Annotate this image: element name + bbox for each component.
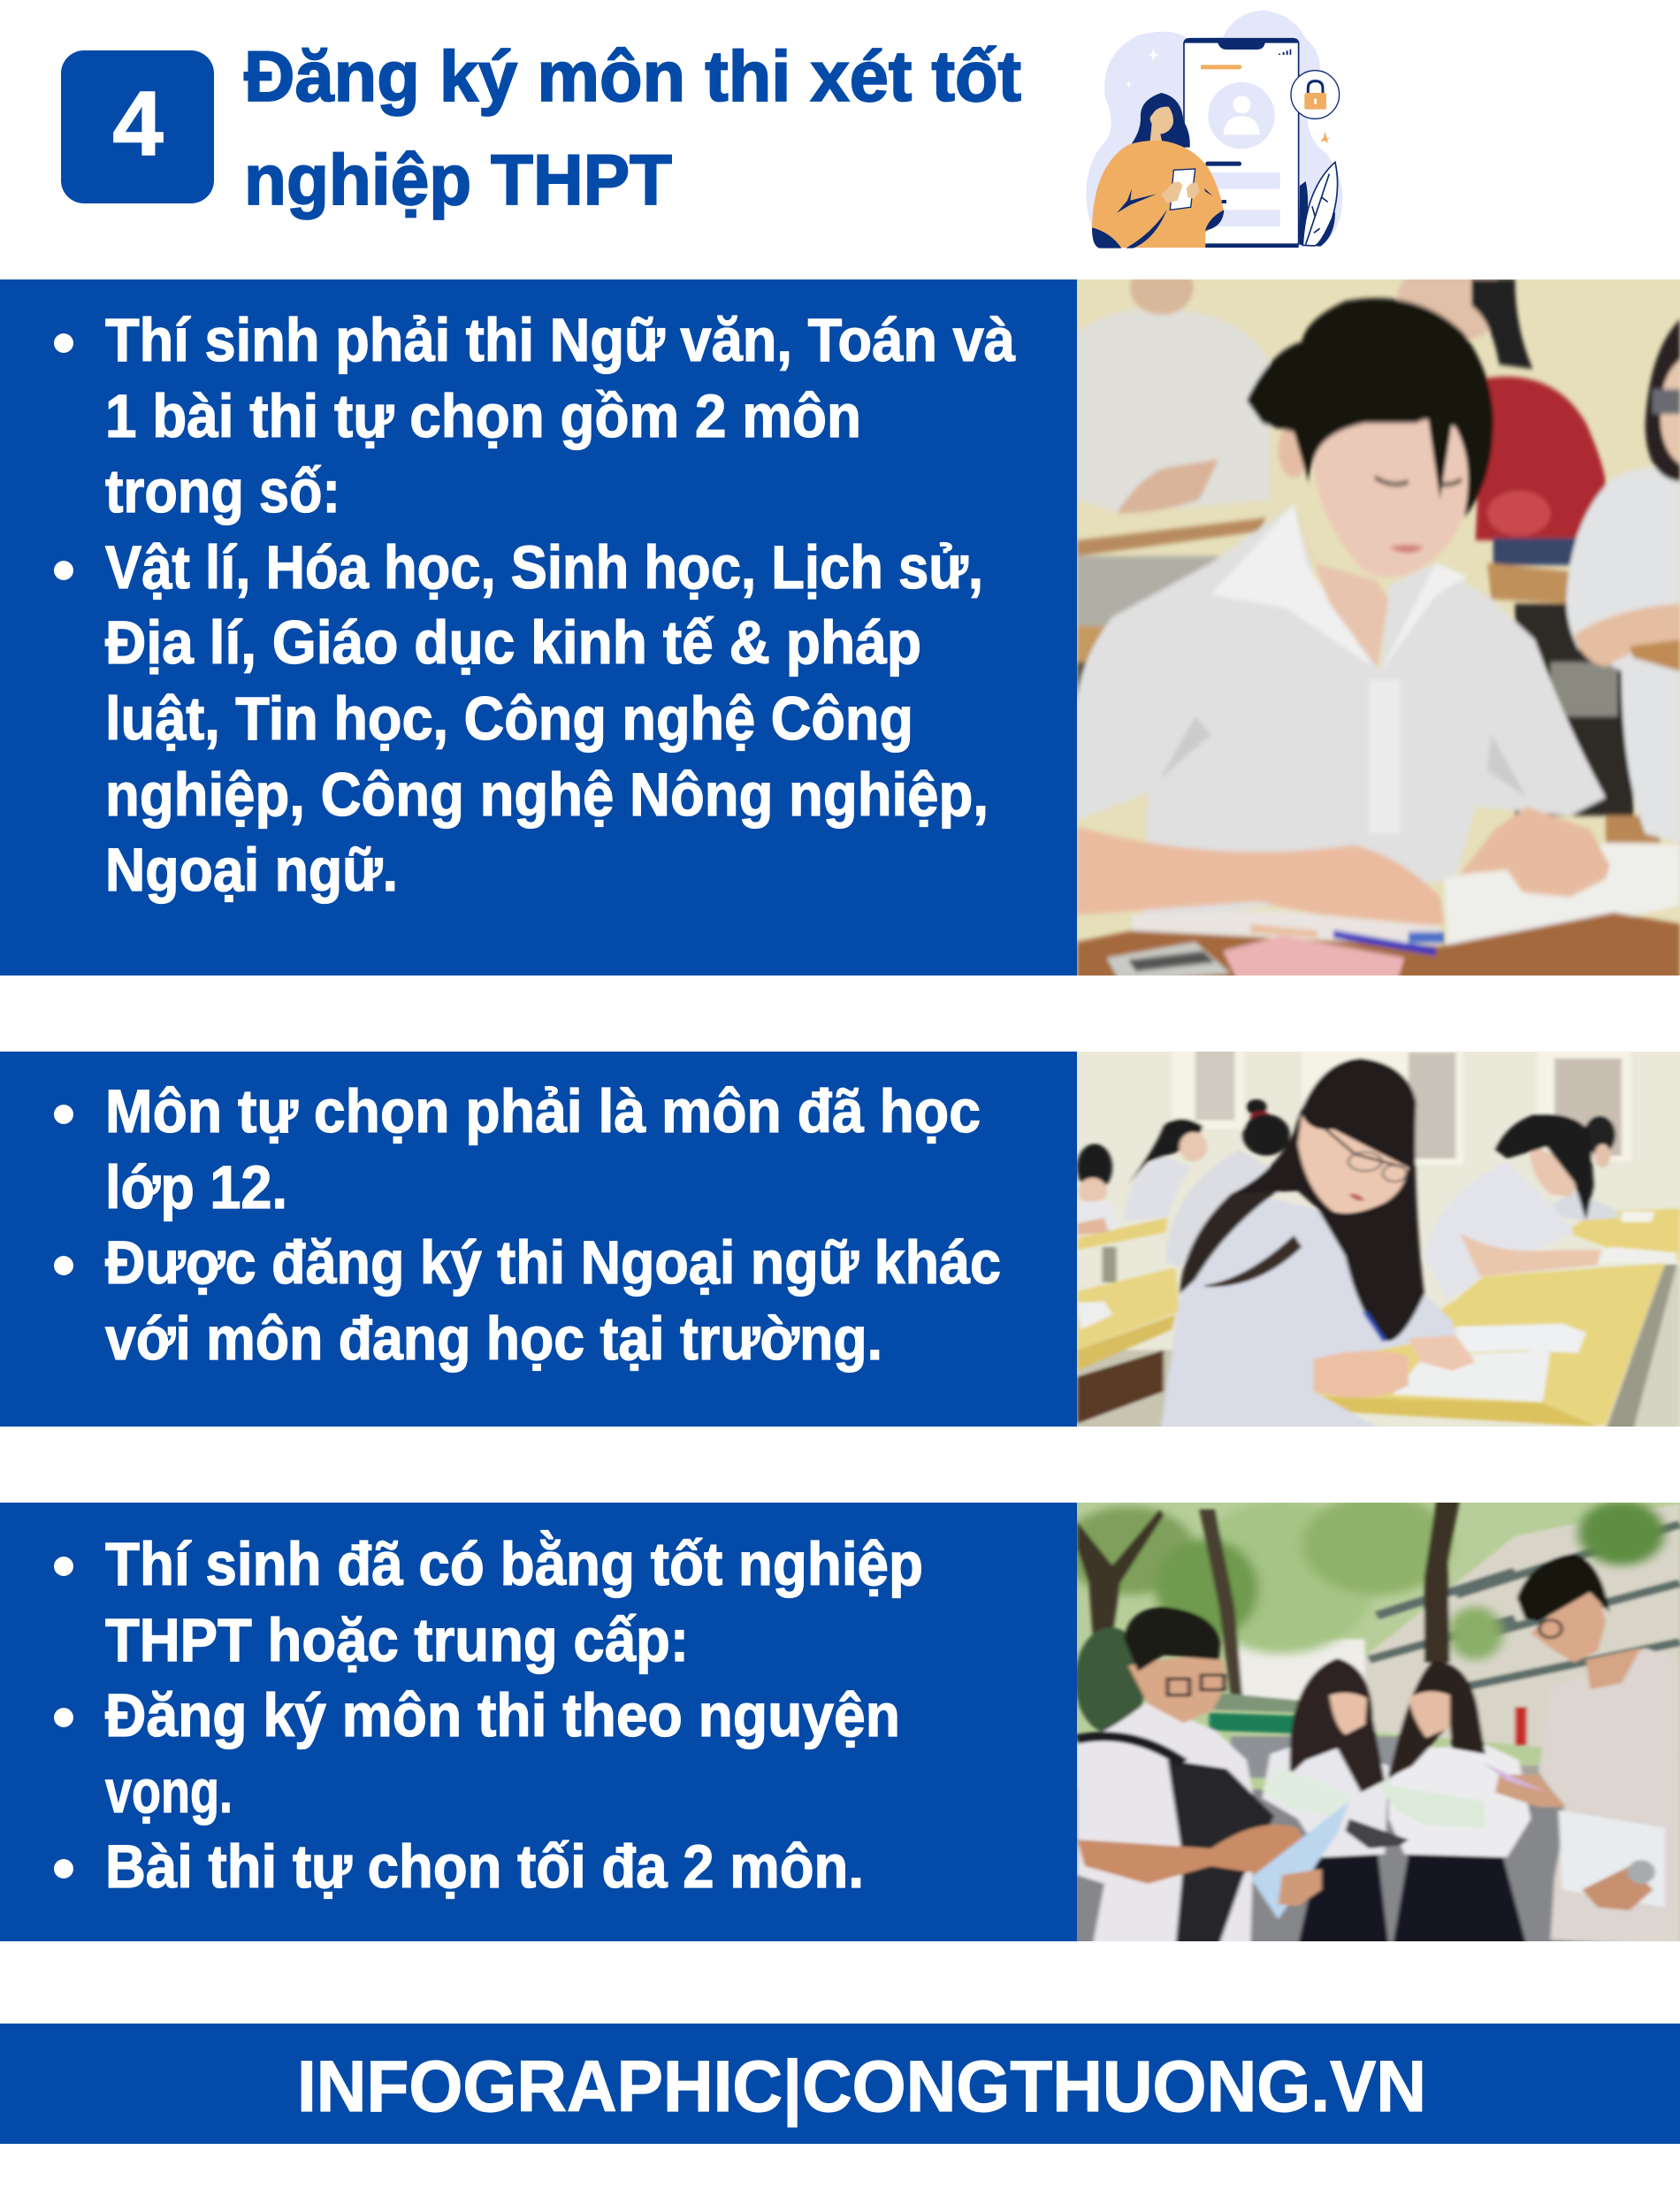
panel 3 background [0,1503,1077,1941]
panel 1: exam subjects [0,261,1680,983]
title [244,37,1021,220]
panel 2 background [0,1052,1077,1427]
panel 1 background [0,279,1077,976]
panel 2 text: lớp 12. [105,1153,287,1221]
panel 2: elective subject rules [0,1050,1680,1435]
panel 2 text: Môn tự chọn phải là môn đã học [105,1077,981,1145]
panel 3 text: Thí sinh đã có bằng tốt nghiệp [105,1530,923,1598]
panel 3 text: Đăng ký môn thi theo nguyện [105,1681,900,1749]
panel 3: candidates with a diploma [0,1495,1680,1948]
panel 1 text: trong số: [105,457,340,525]
panel 3 text [54,1530,923,1901]
footer text: INFOGRAPHIC|CONGTHUONG.VN [297,2047,1426,2128]
photo: students outdoors checking papers [1061,1495,1680,1948]
number badge [61,50,214,203]
header [61,11,1342,249]
panel 2 text: Được đăng ký thi Ngoại ngữ khác [105,1228,1001,1297]
panel 1 text: Thí sinh phải thi Ngữ văn, Toán và [105,306,1016,374]
photo: students in exam room [1077,1050,1680,1435]
title: nghiệp THPT [244,141,672,220]
panel 2 text: với môn đang học tại trường. [105,1305,882,1373]
panel 1 text [54,306,1016,904]
number badge: 4 [112,73,164,174]
panel 1 text: Vật lí, Hóa học, Sinh học, Lịch sử, [105,533,983,601]
panel 1 text: luật, Tin học, Công nghệ Công [105,685,913,753]
panel 3 text: THPT hoặc trung cấp: [105,1606,689,1674]
panel 3 text: vọng. [105,1757,233,1825]
panel 1 text: Địa lí, Giáo dục kinh tế & pháp [105,608,921,677]
panel 1 text: nghiệp, Công nghệ Nông nghiệp, [105,761,989,829]
panel 3 text: Bài thi tự chọn tối đa 2 môn. [105,1833,864,1901]
footer banner [0,2024,1680,2144]
panel 1 text: 1 bài thi tự chọn gồm 2 môn [105,382,861,450]
icon: woman with phone and lock [1086,11,1342,249]
panel 1 text: Ngoại ngữ. [105,836,398,904]
title: Đăng ký môn thi xét tốt [244,37,1021,117]
photo: student writing at desk [1077,261,1680,983]
panel 2 text [54,1077,1001,1373]
